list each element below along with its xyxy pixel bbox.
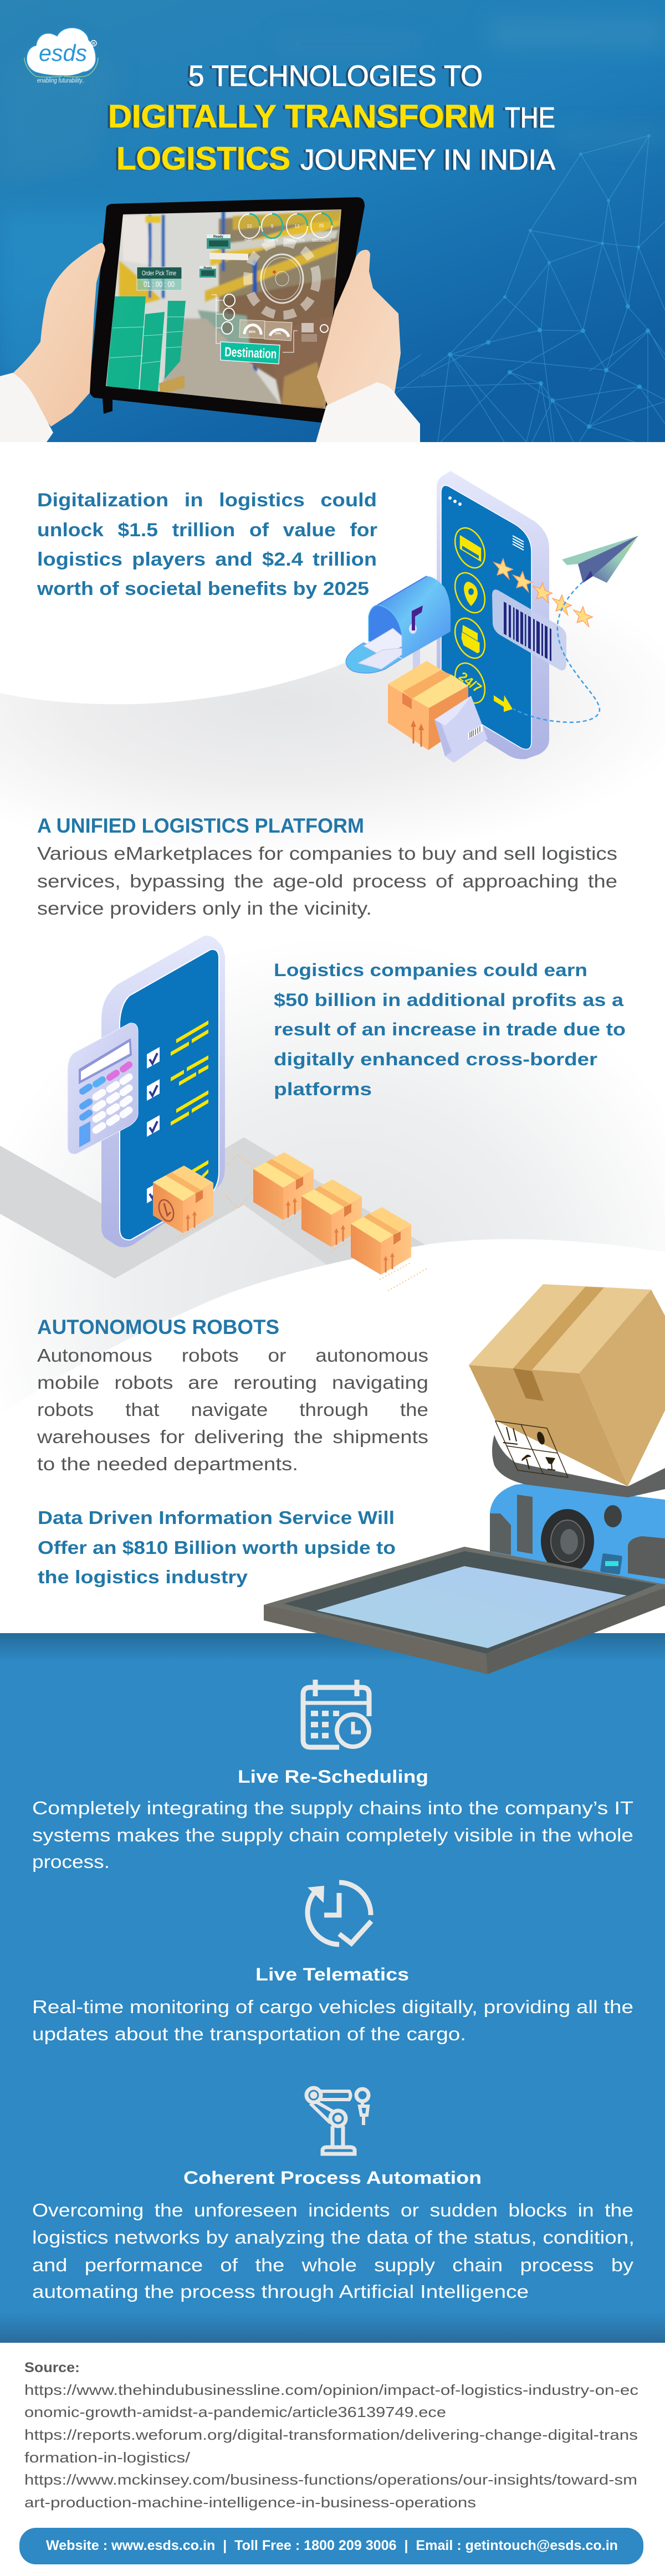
hud: destination label: Destination	[224, 345, 277, 362]
icon: robot arm	[306, 2088, 369, 2154]
tablet screen: HOURS	[264, 239, 278, 243]
text: unified platform body: Various eMarketplaces for companies to buy and sell logistics	[37, 843, 617, 864]
hud: order pick time: 01 : 00 : 00	[144, 280, 175, 289]
text: live telematics body	[32, 1997, 633, 2044]
heading: coherent process automation: Coherent Process Automation	[183, 2168, 482, 2188]
title: LOGISTICS	[116, 141, 290, 177]
hud rings	[239, 213, 332, 238]
title: DIGITALLY TRANSFORM	[108, 99, 495, 135]
panel: blue technologies section	[0, 1633, 665, 2343]
hud gauges	[239, 320, 265, 338]
check boxes	[147, 1047, 160, 1203]
text: unified platform body: services, bypassing the age-old process of approaching the	[37, 871, 617, 891]
illustration: phone checklist with calculator	[68, 936, 427, 1291]
heading: autonomous robots: AUTONOMOUS ROBOTS	[37, 1316, 279, 1338]
illustration: phone with delivery icons	[346, 471, 638, 763]
icon: 24/7	[449, 659, 490, 707]
title	[108, 60, 555, 177]
source list: art-production-machine-intelligence-in-business-operations	[24, 2494, 476, 2511]
parcel bag	[434, 696, 488, 763]
tablet screen: 9	[271, 224, 274, 229]
text: logistics companies stat: digitally enhanced cross-border	[274, 1049, 597, 1069]
text: autonomous robots body: Autonomous robots or autonomous	[37, 1345, 428, 1366]
text: live re-scheduling body	[32, 1798, 633, 1872]
icon: 24/7: 24/7	[456, 669, 484, 696]
text: coherent process automation body	[32, 2200, 635, 2302]
small hud circles	[222, 294, 235, 334]
tablet	[89, 197, 365, 423]
text: live re-scheduling body: Completely integrating the supply chains into the company’s IT	[32, 1798, 633, 1818]
text: logistics companies stat: result of an increase in trade due to	[274, 1019, 626, 1039]
source list: https://www.mckinsey.com/business-functions/operations/our-insights/toward-sm	[24, 2471, 637, 2488]
text: digitalization stat: logistics players and $2.4 trillion	[37, 549, 377, 570]
text: data driven stat: Data Driven Information Service Will	[38, 1507, 395, 1528]
source list: formation-in-logistics/	[24, 2449, 191, 2466]
mailbox	[346, 576, 451, 681]
text: coherent process automation body: Overcoming the unforeseen incidents or sudden blocks in the	[32, 2200, 633, 2220]
title: JOURNEY IN INDIA	[300, 144, 555, 176]
yellow list lines	[171, 1020, 208, 1183]
tablet screen: Ready	[203, 266, 212, 270]
text: coherent process automation body: logistics networks by analyzing the data of the status, condition,	[32, 2227, 635, 2247]
text: digitalization stat: worth of societal benefits by 2025	[37, 578, 369, 599]
arrow on phone	[494, 695, 513, 712]
footer contact bar: Website : www.esds.co.in | Toll Free : 1800 209 3006 | Email : getintouch@esds.co.in	[46, 2538, 618, 2553]
icon: calendar clock	[303, 1680, 369, 1747]
panel: white content background	[0, 460, 665, 1633]
icon: clock with arrow and check	[308, 1882, 371, 1944]
logo: esds cloud	[24, 28, 98, 84]
rating stars	[494, 556, 592, 628]
tablet screen	[106, 209, 341, 409]
phone dots and menu	[448, 496, 524, 550]
text: data driven stat: Offer an $810 Billion worth upside to	[38, 1537, 396, 1558]
heading: a unified logistics platform: A UNIFIED LOGISTICS PLATFORM	[37, 814, 364, 837]
hud: order pick time: Order Pick Time	[142, 269, 176, 277]
calculator	[68, 1023, 138, 1154]
delivery boxes	[153, 1152, 427, 1291]
cardboard box	[469, 1284, 665, 1486]
text: autonomous robots body: warehouses for delivering the shipments	[37, 1426, 428, 1447]
text: live re-scheduling body: systems makes the supply chain completely visible in the whole	[32, 1825, 633, 1845]
text: digitalization stat: unlock $1.5 trillion of value for	[37, 520, 377, 541]
hud: order pick time	[137, 267, 182, 290]
logo: esds cloud: R	[92, 42, 95, 46]
text: live telematics body: updates about the transportation of the cargo.	[32, 2024, 466, 2044]
tablet screen: SECONDS	[312, 239, 331, 243]
icon: location pin	[449, 568, 490, 617]
text: data driven stat	[38, 1507, 396, 1587]
icon: truck	[449, 614, 490, 663]
tablet screen: MINUTES	[287, 239, 305, 243]
robot tray	[492, 1435, 665, 1497]
source list	[24, 2360, 638, 2511]
barcode card	[492, 589, 566, 670]
source list: onomic-growth-amidst-a-pandemic/article36139749.ece	[24, 2404, 446, 2420]
icon: card	[449, 524, 490, 572]
text: unified platform body: service providers only in the vicinity.	[37, 898, 372, 918]
dashed route	[514, 582, 600, 722]
text: unified platform body	[37, 843, 617, 918]
logo: esds cloud: esds	[39, 40, 87, 66]
tablet screen: 13	[295, 224, 300, 229]
footer contact bar	[19, 2528, 643, 2564]
hud barcode labels	[207, 238, 231, 249]
title: THE	[505, 102, 555, 134]
tablet screen: 25	[319, 223, 324, 228]
tablet screen: Ready	[213, 235, 224, 239]
loading platform	[264, 1547, 665, 1674]
tablet screen: DAY	[244, 239, 252, 243]
right hand	[316, 250, 420, 442]
heading: live re-scheduling: Live Re-Scheduling	[238, 1767, 428, 1787]
panel: header hero	[0, 0, 665, 442]
tablet screen: 15	[247, 224, 252, 229]
text: logistics companies stat: Logistics companies could earn	[274, 960, 587, 980]
text: logistics companies stat	[274, 960, 626, 1099]
parcel box	[388, 661, 468, 750]
text: logistics companies stat: $50 billion in additional profits as a	[274, 990, 623, 1010]
logo: esds cloud: enabling futurability..	[37, 78, 85, 84]
text: live telematics body: Real-time monitoring of cargo vehicles digitally, providing all the	[32, 1997, 633, 2017]
text: logistics companies stat: platforms	[274, 1079, 372, 1099]
text: digitalization stat	[37, 490, 377, 599]
left hand	[0, 243, 105, 442]
text: autonomous robots body: robots that navigate through the	[37, 1399, 428, 1420]
hud gear	[248, 242, 316, 315]
text: live re-scheduling body: process.	[32, 1851, 110, 1872]
network lines	[388, 136, 665, 442]
tablet screen: 70%	[274, 332, 282, 336]
robot body	[490, 1484, 665, 1584]
source list: https://reports.weforum.org/digital-transformation/delivering-change-digital-trans	[24, 2426, 638, 2443]
illustration: warehouse robot carrying box	[264, 1284, 665, 1674]
text: digitalization stat: Digitalization in logistics could	[37, 490, 377, 511]
hud: destination label	[221, 342, 280, 364]
heading: live telematics: Live Telematics	[255, 1964, 409, 1984]
text: coherent process automation body: automating the process through Artificial Intelligence	[32, 2281, 529, 2302]
source list: Source:	[24, 2360, 80, 2375]
text: autonomous robots body	[37, 1345, 428, 1474]
paper plane	[562, 536, 638, 583]
title: 5 TECHNOLOGIES TO	[188, 60, 483, 93]
box handling marks	[495, 1421, 568, 1477]
text: autonomous robots body: to the needed departments.	[37, 1454, 298, 1474]
text: data driven stat: the logistics industry	[38, 1567, 248, 1587]
text: coherent process automation body: and performance of the whole supply chain process by	[32, 2255, 634, 2275]
text: autonomous robots body: mobile robots are rerouting navigating	[37, 1372, 428, 1393]
source list: https://www.thehindubusinessline.com/opinion/impact-of-logistics-industry-on-ec	[24, 2382, 638, 2398]
tablet screen: 86%	[249, 331, 256, 334]
